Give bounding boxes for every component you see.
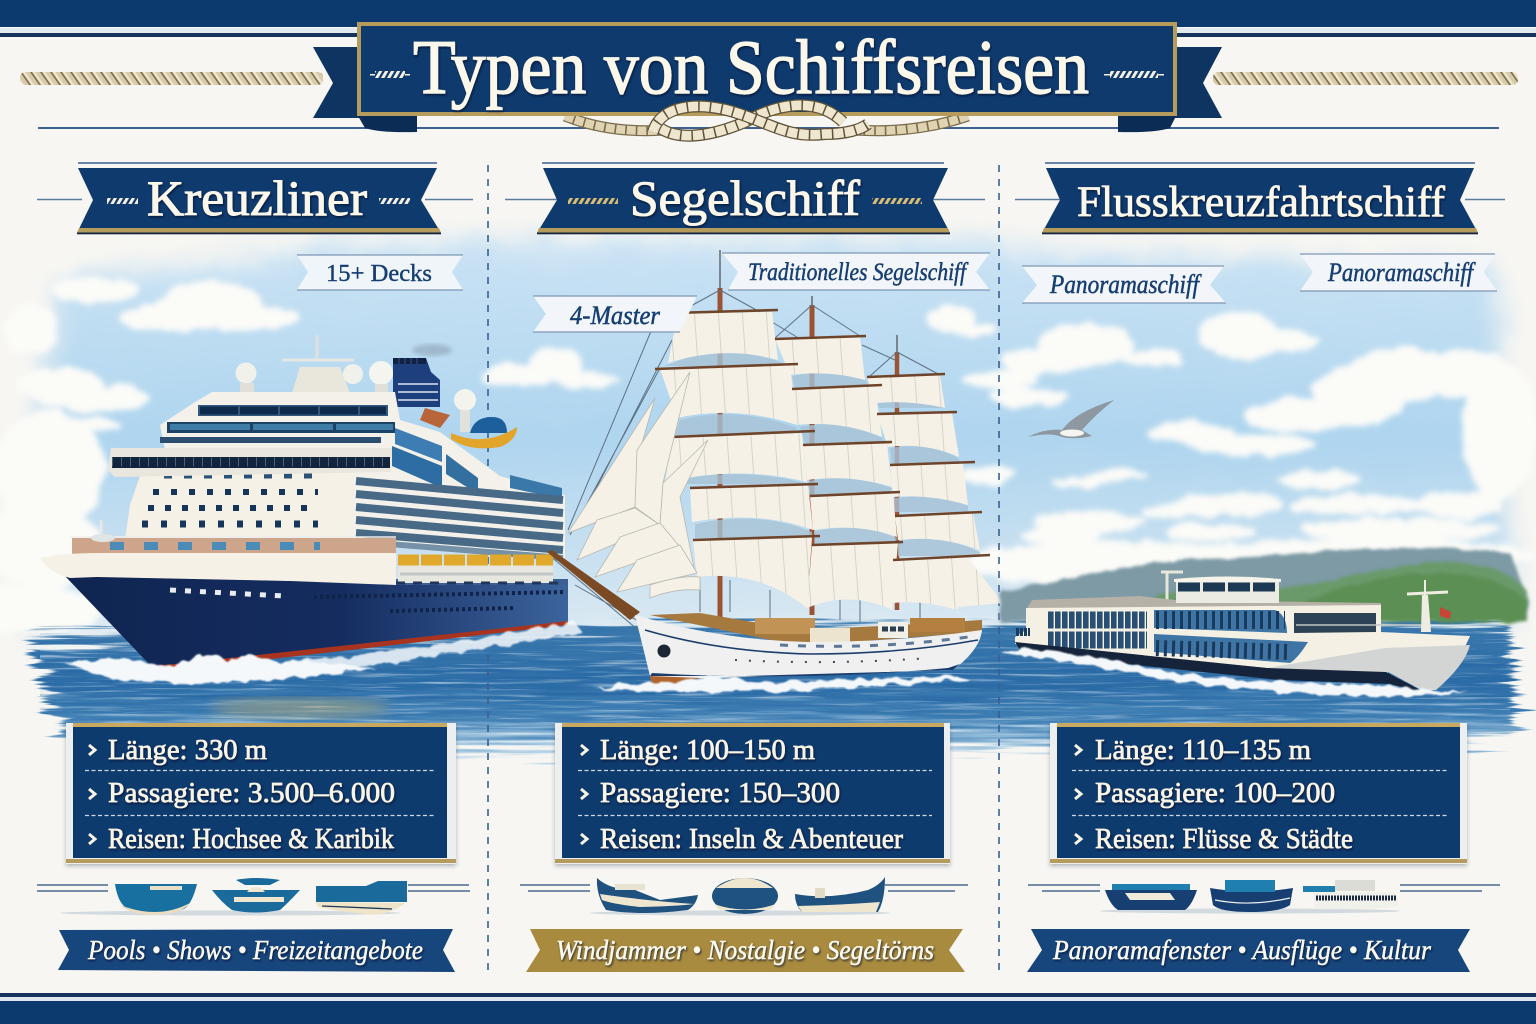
rope left <box>20 72 323 85</box>
heading ribbon: Flusskreuzfahrtschiff <box>1077 179 1446 226</box>
bow hull <box>1267 645 1470 692</box>
sky backdrop with clouds <box>0 240 1536 640</box>
facts box: Länge: 100–150 m <box>600 734 815 766</box>
facts box: Länge: 330 m <box>108 734 267 766</box>
bowsprit <box>547 550 640 620</box>
rear hull top with portholes <box>170 579 568 611</box>
tag: Traditionelles Segelschiff: Traditionelles Segelschiff <box>748 259 969 286</box>
facts box <box>1050 723 1467 864</box>
tag: Panoramaschiff left: Panoramaschiff <box>1049 270 1202 299</box>
heading ribbon <box>37 162 473 234</box>
facts box: Passagiere: 150–300 <box>600 777 840 809</box>
hull details <box>645 630 978 690</box>
lifeboats <box>396 560 558 583</box>
boat icon 1 <box>115 884 197 915</box>
feature ribbon <box>1027 929 1470 972</box>
boat icon 2 <box>1210 880 1293 912</box>
facts box: Länge: 110–135 m <box>1095 734 1311 766</box>
forest hills <box>1000 548 1528 622</box>
facts box: Reisen: Hochsee & Karibik <box>108 823 394 855</box>
feature ribbon: Panoramafenster • Ausflüge • Kultur <box>1052 935 1431 965</box>
deck structures <box>650 613 982 646</box>
wake <box>1000 648 1470 696</box>
bridge deck <box>108 448 392 477</box>
sails mast two <box>775 337 898 610</box>
roof deck and cabin <box>1026 572 1381 610</box>
boat icon 3 <box>316 881 407 915</box>
boat icon 1 <box>597 878 698 913</box>
white bow hull <box>40 553 396 585</box>
heading ribbon: Segelschiff <box>630 170 860 226</box>
tag: 15+ Decks <box>297 255 463 290</box>
front white block with windows <box>125 470 353 540</box>
window bands <box>1016 610 1420 663</box>
dashed divider left <box>487 165 489 974</box>
rule under header <box>38 127 1499 129</box>
boat icon 2 <box>712 878 778 914</box>
rope under plate <box>565 116 968 131</box>
cruise ship illustration <box>40 335 582 684</box>
tag: 15+ Decks: 15+ Decks <box>326 261 432 287</box>
facts box: Reisen: Flüsse & Städte <box>1095 823 1353 855</box>
dashed divider right <box>998 165 1000 974</box>
dark hull strip <box>1015 642 1436 694</box>
bow wave <box>65 622 582 684</box>
panel: Kreuzliner <box>37 162 582 972</box>
facts box: Passagiere: 3.500–6.000 <box>108 777 395 809</box>
jib sails <box>568 372 708 598</box>
facts box <box>66 723 456 864</box>
boat icon 3 <box>1303 880 1399 909</box>
rigging <box>555 290 940 640</box>
title decoration right <box>1104 71 1164 78</box>
feature ribbon <box>58 929 455 972</box>
rope right <box>1213 72 1518 85</box>
boat icon 3 <box>795 877 885 912</box>
panel: Flusskreuzfahrtschiff <box>1000 162 1528 972</box>
red boot stripe <box>150 621 568 670</box>
promenade deck <box>70 520 396 555</box>
tag: Panoramaschiff right: Panoramaschiff <box>1327 258 1476 287</box>
upper decks <box>160 392 565 558</box>
bow wave <box>595 676 970 693</box>
tag: Panoramaschiff left <box>1022 266 1226 303</box>
tag: 4-Master <box>533 296 697 332</box>
facts box: Passagiere: 100–200 <box>1095 777 1335 809</box>
ribbon folds <box>358 116 1176 132</box>
heading ribbon <box>505 162 985 234</box>
boat icon 2 <box>212 878 300 912</box>
superstructure <box>1015 605 1470 668</box>
title decoration left <box>370 71 410 78</box>
title plate <box>359 24 1175 114</box>
small boat icons row <box>37 878 470 916</box>
ribbon tail left <box>313 47 362 118</box>
waterslide and pool dome <box>420 408 517 448</box>
bottom border band <box>0 993 1536 1024</box>
boat icon 1 <box>1105 884 1197 910</box>
mast and radar domes <box>236 335 476 432</box>
feature ribbon <box>526 929 965 972</box>
sea water <box>30 625 1515 752</box>
feature ribbon: Pools • Shows • Freizeitangebote <box>87 935 423 965</box>
yards <box>655 310 990 560</box>
funnel <box>393 344 452 407</box>
white hull <box>635 615 982 680</box>
navy hull <box>65 576 568 668</box>
feature ribbon: Windjammer • Nostalgie • Segeltörns <box>556 935 934 965</box>
sails mast three <box>867 375 1003 610</box>
sails mast one <box>660 312 813 608</box>
top border band <box>0 0 1536 37</box>
ribbon tail right <box>1172 47 1222 118</box>
bow mast and flag <box>1407 580 1451 632</box>
icon: seagull <box>1028 400 1114 438</box>
small boat icons row <box>520 877 968 916</box>
tall ship illustration <box>547 250 1003 693</box>
small boat icons row <box>1028 880 1500 914</box>
rear balcony rows <box>352 481 563 558</box>
panel: Segelschiff <box>505 162 1003 972</box>
tag: 4-Master: 4-Master <box>570 301 661 330</box>
heading ribbon: Kreuzliner <box>147 170 367 226</box>
facts box <box>555 723 950 864</box>
title text: Typen von Schiffsreisen <box>413 24 1089 110</box>
tag: Traditionelles Segelschiff <box>722 253 990 290</box>
arched rigging gaps <box>665 352 980 556</box>
title banner <box>313 24 1222 136</box>
masts <box>720 250 897 620</box>
tag: Panoramaschiff right <box>1300 254 1497 291</box>
heading ribbon <box>1015 162 1505 234</box>
rope knot <box>653 105 868 136</box>
river cruise ship illustration <box>1000 572 1470 696</box>
facts box: Reisen: Inseln & Abenteuer <box>600 823 903 855</box>
